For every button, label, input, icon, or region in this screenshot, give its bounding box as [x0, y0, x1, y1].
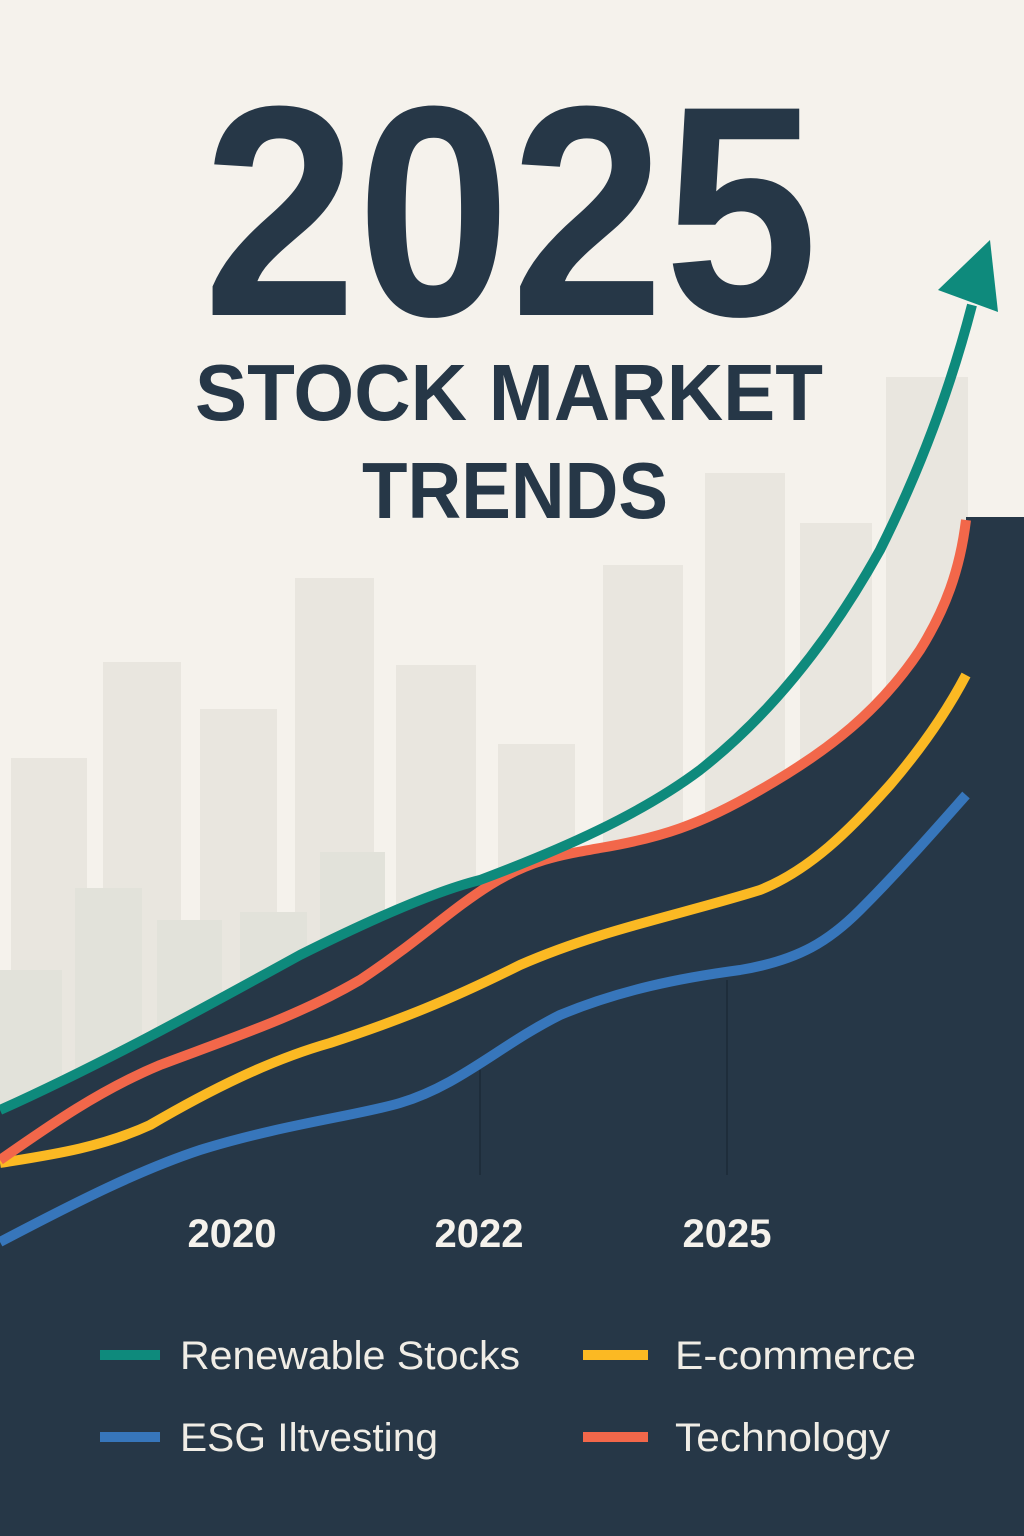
legend item: Technology: Technology: [675, 1416, 890, 1460]
title: 2025: 2025: [203, 43, 818, 379]
legend item: E-commerce: [583, 1334, 916, 1378]
subtitle: stock market trends: STOCK MARKET: [195, 348, 823, 437]
legend item: Technology: [583, 1416, 890, 1460]
faint grid lines: [480, 980, 727, 1175]
legend item: Renewable Stocks: Renewable Stocks: [180, 1334, 520, 1378]
background bars: [0, 377, 968, 1520]
line: E-commerce (yellow): [0, 675, 966, 1163]
dark area chart fill: [0, 517, 1024, 1536]
x-axis year labels: 2022: [435, 1212, 523, 1256]
line: Renewable Stocks (teal) with arrow: [0, 240, 998, 1110]
subtitle: stock market trends: TRENDS: [362, 446, 668, 535]
x-axis year labels: [188, 1212, 771, 1256]
legend item: E-commerce: E-commerce: [675, 1334, 916, 1378]
legend: [100, 1334, 916, 1460]
line: Technology (red): [0, 520, 966, 1160]
subtitle: stock market trends: [195, 348, 823, 535]
line: ESG investing (blue): [0, 795, 966, 1242]
legend item: ESG investing: ESG Iltvesting: [180, 1416, 438, 1460]
x-axis year labels: 2025: [683, 1212, 771, 1256]
x-axis year labels: 2020: [188, 1212, 276, 1256]
